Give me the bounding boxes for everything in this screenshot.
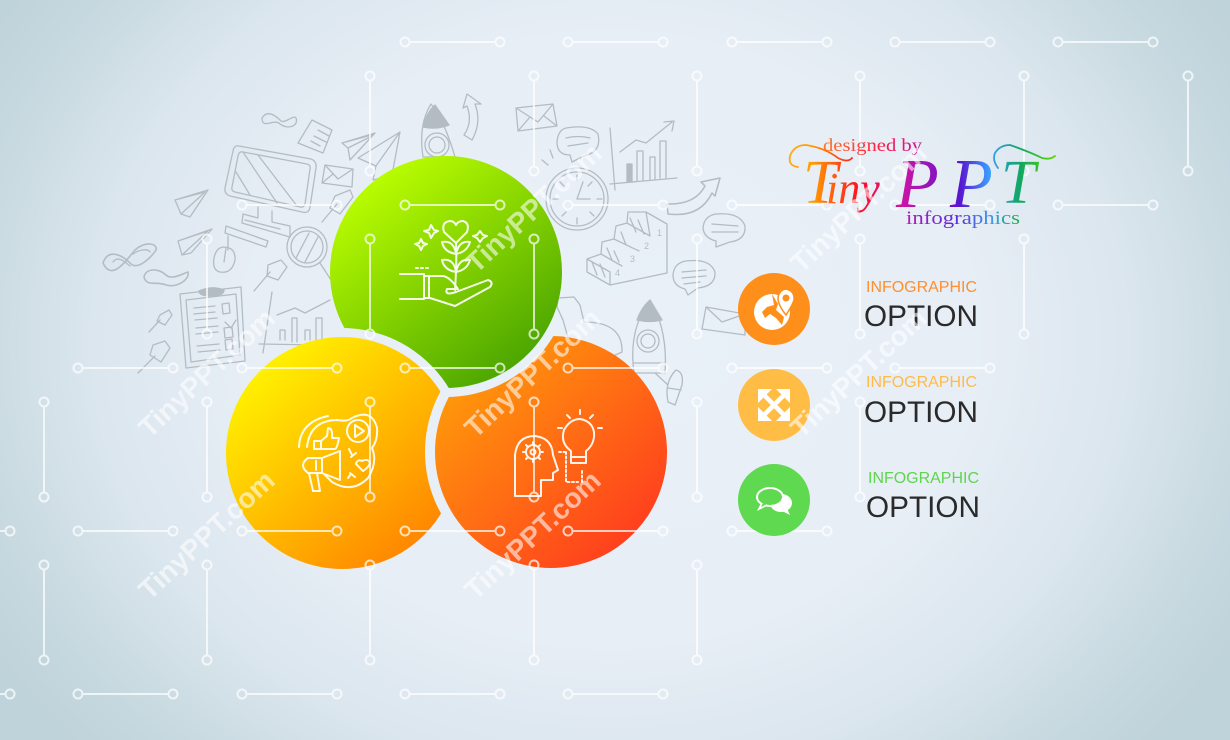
doodle: magnifier [287,227,331,280]
watermarks: TinyPPT.com: TinyPPT.com [458,464,607,606]
doodle: rocket lower [633,300,682,405]
doodle illustration background [103,94,745,405]
label: option: OPTION [864,396,978,429]
label: infographic: INFOGRAPHIC [868,470,979,487]
doodle: infinity loops [103,114,297,286]
doodle: rocket top [422,104,455,157]
logo flourish [790,145,1055,168]
doodle: left bar chart [259,292,330,353]
doodle: speech bubbles [557,127,745,295]
watermarks: TinyPPT.com: TinyPPT.com [132,302,281,444]
doodle: clock [542,150,608,230]
icon: expand arrows [738,369,810,441]
option 2 [738,369,978,441]
logo: designed by TinyPPT infographics [790,135,1055,229]
watermarks: TinyPPT.com: TinyPPT.com [784,302,933,444]
circle: yellow [226,337,458,569]
label: infographic: INFOGRAPHIC [866,279,977,296]
watermarks: TinyPPT.com: TinyPPT.com [458,302,607,444]
label: option: OPTION [866,491,980,524]
doodle: stairs: 2 [644,241,649,251]
option 3 [738,464,980,536]
logo wordmark: P [949,146,993,223]
doodle: envelopes [322,104,745,335]
circle: orange [435,336,667,568]
option 1 [738,273,978,345]
logo line: designed by: designed by [823,135,922,155]
doodle: paper planes [175,132,400,255]
doodle: monitor and keyboard [214,146,316,272]
doodle: stairs: 3 [630,254,635,264]
doodle: clipboard [180,287,245,368]
doodle: stairs [587,212,667,285]
panel: three interlocking circles [226,156,667,569]
logo wordmark: T [803,149,842,217]
watermarks: TinyPPT.com [132,137,933,606]
doodle: curved right arrow [667,178,720,215]
label: option: OPTION [864,300,978,333]
doodle: push pins [138,190,353,373]
icon: head with gear and light bulb [515,410,602,496]
icon: megaphone with thumbs up, play button and heart [299,415,377,491]
watermarks: TinyPPT.com: TinyPPT.com [784,137,933,279]
logo line: infographics: infographics [906,208,1020,229]
icon: chat bubbles [738,464,810,536]
logo wordmark: T [1001,149,1040,217]
doodle: curved up arrow [463,94,481,140]
doodle: stairs: 1 [657,228,662,238]
doodle: stairs: 4 [615,268,620,278]
doodle: money bag [557,297,622,362]
watermarks: TinyPPT.com: TinyPPT.com [132,464,281,606]
circle: green [330,156,562,388]
icon: globe with location pin [738,273,810,345]
label: infographic: INFOGRAPHIC [866,374,977,391]
doodle: right bar chart [610,121,677,190]
logo wordmark: iny [826,164,880,213]
watermarks: TinyPPT.com: TinyPPT.com [459,137,608,279]
icon: hand holding plant with heart [400,221,492,306]
logo wordmark: P [895,146,939,223]
doodle: sticky note [298,120,332,153]
